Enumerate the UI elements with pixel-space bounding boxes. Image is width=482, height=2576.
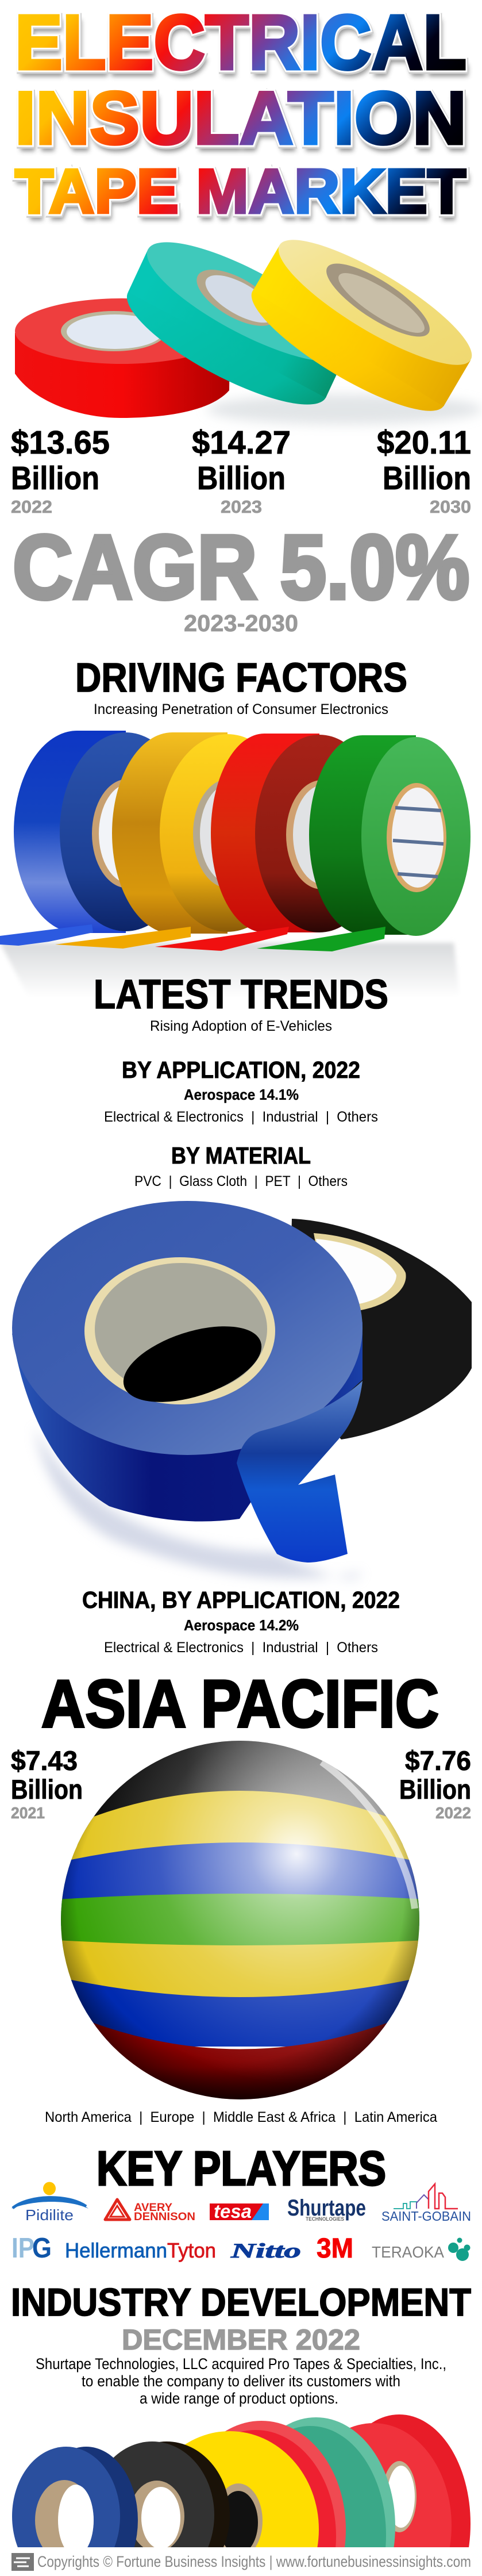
logo: Teraoka bbox=[372, 2237, 470, 2261]
green roll bbox=[257, 735, 471, 951]
sphere highlight bbox=[83, 1741, 419, 2066]
title outline bbox=[16, 0, 467, 228]
logo: Shurtape: TECHNOLOGIES bbox=[306, 2216, 344, 2222]
logo: Avery Dennison bbox=[105, 2199, 195, 2223]
heading: by material: BY MATERIAL bbox=[171, 1142, 311, 1169]
title white rim bbox=[15, 0, 466, 226]
ground reflection bbox=[0, 943, 460, 997]
sphere edge shading bbox=[61, 1817, 419, 2099]
blue roll bbox=[0, 731, 192, 946]
yellow roll bbox=[55, 732, 295, 949]
year: 2021 bbox=[11, 1804, 45, 1822]
material list: PVC | Glass Cloth | PET | Others bbox=[134, 1173, 348, 1189]
band: black bbox=[77, 1741, 403, 1845]
logo: IPG: G bbox=[32, 2233, 52, 2264]
logo: Saint-Gobain bbox=[381, 2184, 471, 2224]
glass arc bbox=[322, 1762, 415, 1909]
logo: Pidilite: Pidilite bbox=[25, 2206, 74, 2224]
logo: Avery Dennison: DENNISON bbox=[134, 2211, 195, 2223]
title bbox=[15, 0, 469, 232]
cream core bbox=[84, 1257, 275, 1404]
unit: Billion bbox=[197, 460, 286, 497]
year: 2022 bbox=[11, 497, 52, 517]
logo: Avery Dennison: AVERY bbox=[134, 2202, 172, 2214]
heading: by application: BY APPLICATION, 2022 bbox=[122, 1057, 360, 1083]
china aerospace share: Aerospace 14.2% bbox=[184, 1617, 299, 1634]
logo: IPG: IP bbox=[11, 2233, 34, 2264]
red roll bbox=[155, 734, 384, 951]
title outline: TAPE MARKET bbox=[16, 158, 466, 228]
logo: tesa: tesa bbox=[214, 2201, 252, 2222]
heading: driving factors: DRIVING FACTORS bbox=[75, 655, 407, 701]
stat: asia pacific 2022 bbox=[399, 1745, 471, 1822]
logo: HellermannTyton: Tyton bbox=[167, 2239, 216, 2262]
unit: Billion bbox=[11, 460, 99, 497]
green roll bbox=[286, 2417, 395, 2547]
heading: china by application: CHINA, BY APPLICATION, 2022 bbox=[82, 1587, 400, 1613]
teal roll bbox=[113, 221, 361, 425]
red roll back bbox=[349, 2414, 471, 2547]
application list: Electrical & Electronics | Industrial | Others bbox=[104, 1109, 378, 1125]
year: 2023 bbox=[221, 497, 262, 517]
development text: a wide range of product options. bbox=[140, 2390, 338, 2407]
tape flap bbox=[237, 1381, 363, 1563]
image: four tape rolls bbox=[0, 731, 471, 997]
band: blue top bbox=[57, 1842, 425, 1926]
heading: asia pacific: ASIA PACIFIC bbox=[41, 1666, 439, 1741]
stat: 2023 bbox=[192, 424, 291, 517]
image: blue and black tape bbox=[12, 1201, 472, 1579]
unit: Billion bbox=[399, 1774, 471, 1805]
heading: key players: KEY PLAYERS bbox=[97, 2141, 386, 2195]
band: green bbox=[57, 1894, 425, 1955]
value: $20.11 bbox=[377, 424, 471, 461]
ground shadow bbox=[34, 1426, 362, 1579]
heading: latest trends: LATEST TRENDS bbox=[94, 972, 388, 1018]
development date: DECEMBER 2022 bbox=[122, 2324, 360, 2356]
unit: Billion bbox=[11, 1774, 83, 1805]
logo: tesa bbox=[210, 2201, 269, 2222]
development text bbox=[36, 2355, 446, 2407]
logo: 3M: 3M bbox=[317, 2233, 353, 2264]
grey core bbox=[95, 1263, 267, 1395]
logo: HellermannTyton bbox=[65, 2239, 216, 2262]
year: 2030 bbox=[430, 497, 471, 517]
blue roll bbox=[12, 2447, 138, 2547]
logo: Pidilite bbox=[11, 2182, 88, 2224]
stat: 2030 bbox=[377, 424, 471, 517]
driving factor text: Increasing Penetration of Consumer Electronics bbox=[94, 701, 388, 717]
blue roll body bbox=[12, 1322, 363, 1522]
value: $7.43 bbox=[11, 1745, 78, 1776]
china application list: Electrical & Electronics | Industrial | Others bbox=[104, 1640, 378, 1656]
logo: IPG bbox=[11, 2233, 52, 2264]
black roll bbox=[113, 2441, 230, 2547]
logo: Teraoka: TERAOKA bbox=[372, 2243, 444, 2261]
logo: HellermannTyton: Hellermann bbox=[65, 2239, 167, 2262]
footer logo bbox=[11, 2553, 34, 2571]
black roll bbox=[287, 1219, 472, 1439]
stat: asia pacific 2021 bbox=[11, 1745, 83, 1822]
title line 3: TAPE MARKET bbox=[15, 156, 466, 226]
aerospace share: Aerospace 14.1% bbox=[184, 1086, 299, 1103]
blue roll face bbox=[12, 1201, 363, 1455]
development text: to enable the company to deliver its customers with bbox=[82, 2372, 400, 2390]
title shadow: INSULATION bbox=[17, 82, 469, 166]
chart: striped sphere bbox=[57, 1736, 425, 2104]
image: three tape rolls bbox=[15, 220, 482, 431]
band: blue bottom bbox=[71, 1980, 409, 2047]
unit: Billion bbox=[383, 460, 471, 497]
footer bbox=[11, 2553, 471, 2571]
value: $13.65 bbox=[11, 424, 110, 461]
red roll bbox=[15, 298, 230, 418]
logo: Nitto: Nitto bbox=[230, 2239, 301, 2262]
title line 2: INSULATION bbox=[15, 76, 466, 160]
title white rim: INSULATION bbox=[15, 76, 466, 160]
title outline: INSULATION bbox=[16, 77, 467, 161]
band: yellow bottom bbox=[57, 1940, 425, 2001]
image: row of six tape rolls bbox=[12, 2414, 471, 2547]
logo: Saint-Gobain: SAINT-GOBAIN bbox=[381, 2209, 471, 2224]
red roll bbox=[225, 2421, 346, 2547]
title white rim: TAPE MARKET bbox=[15, 156, 466, 226]
stat: 2022 bbox=[11, 424, 110, 517]
core shadow bbox=[114, 1311, 271, 1417]
value: $7.76 bbox=[405, 1745, 471, 1776]
region list: North America | Europe | Middle East & Africa | Latin America bbox=[45, 2109, 437, 2125]
yellow roll bbox=[185, 2431, 319, 2547]
year: 2022 bbox=[435, 1804, 471, 1822]
title shadow: TAPE MARKET bbox=[17, 162, 468, 232]
value: $14.27 bbox=[192, 424, 291, 461]
band: red bbox=[93, 2022, 387, 2099]
logo: Shurtape: Shurtape bbox=[287, 2195, 366, 2221]
title shadow bbox=[17, 5, 469, 232]
ground shadow bbox=[207, 394, 482, 424]
CAGR period: 2023-2030 bbox=[184, 610, 298, 636]
band: yellow top bbox=[57, 1791, 425, 1897]
trend text: Rising Adoption of E-Vehicles bbox=[150, 1018, 332, 1034]
yellow roll bbox=[238, 220, 482, 431]
